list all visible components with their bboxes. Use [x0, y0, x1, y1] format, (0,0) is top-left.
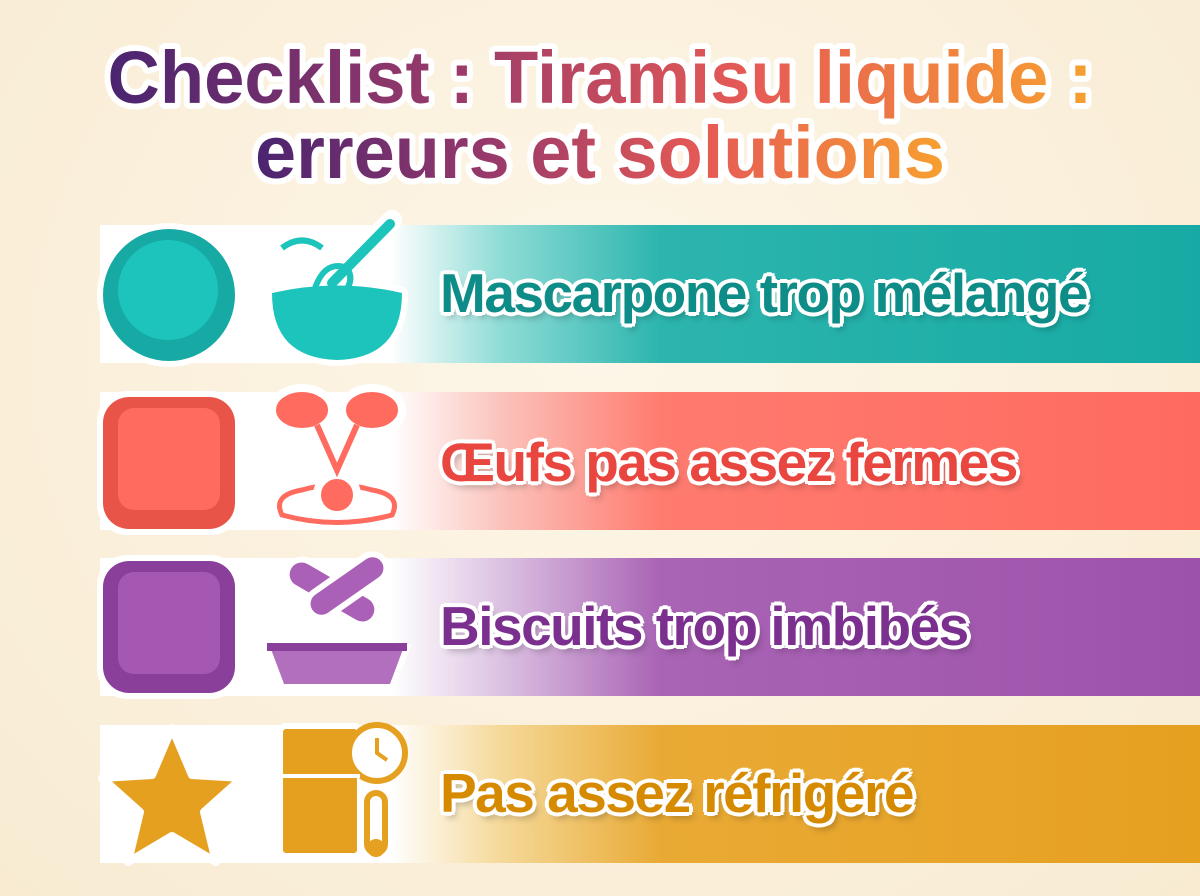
icon: fridge clock thermometer	[280, 722, 408, 857]
row 4: Réfrigéré: Pas assez réfrigéré	[440, 762, 913, 824]
row 2: Oeufs: Œufs pas assez fermes	[440, 431, 1017, 493]
icon: coral square	[97, 391, 235, 535]
title	[104, 36, 1092, 194]
icon: star	[98, 724, 233, 866]
icon: biscuits bowl	[267, 551, 411, 684]
icon: bowl whisk	[272, 210, 408, 366]
icon: purple square	[97, 555, 235, 699]
row 2: Oeufs	[100, 392, 1200, 530]
title: Checklist : Tiramisu liquide :	[108, 36, 1092, 119]
icon: cracked egg	[276, 384, 406, 525]
icon: teal circle	[97, 223, 235, 367]
row 1: Mascarpone: Mascarpone trop mélangé	[440, 262, 1087, 324]
row 1: Mascarpone	[100, 225, 1200, 363]
row 3: Biscuits	[100, 558, 1200, 696]
title: erreurs et solutions	[255, 111, 945, 194]
row 3: Biscuits: Biscuits trop imbibés	[440, 595, 968, 657]
row 4: Réfrigéré	[100, 725, 1200, 863]
